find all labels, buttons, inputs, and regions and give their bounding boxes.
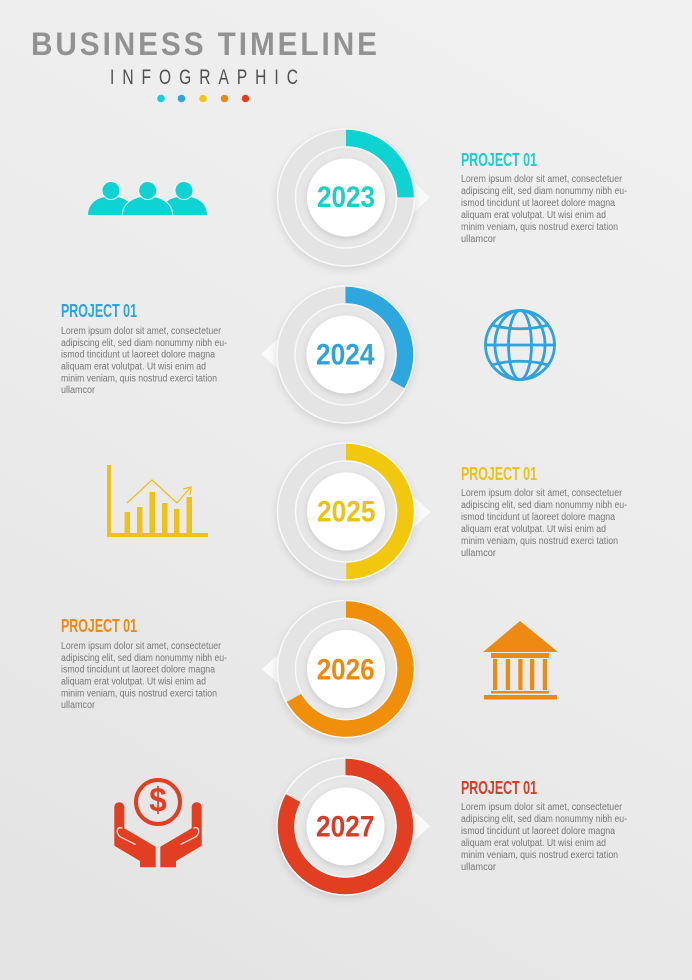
title: BUSINESS TIMELINE	[31, 26, 377, 62]
text block: project 2027	[461, 777, 627, 873]
text block: project 2026: PROJECT 01	[61, 615, 137, 636]
text block: project 2026: adipiscing elit, sed diam nonummy nibh eu-	[61, 653, 227, 664]
icon: globe	[485, 310, 555, 380]
text block: project 2027: ismod tincidunt ut laoreet dolore magna	[461, 826, 615, 837]
text block: project 2023: aliquam erat volutpat. Ut wisi enim ad	[461, 210, 606, 221]
timeline node: 2027	[277, 758, 430, 895]
text block: project 2024: Lorem ipsum dolor sit amet, consectetuer	[61, 326, 222, 337]
text block: project 2027: PROJECT 01	[461, 777, 537, 798]
text block: project 2025	[461, 463, 627, 559]
text block: project 2024: PROJECT 01	[61, 300, 137, 321]
text block: project 2023: Lorem ipsum dolor sit amet, consectetuer	[461, 174, 623, 185]
text block: project 2024: ismod tincidunt ut laoreet dolore magna	[61, 350, 215, 360]
text block: project 2025: minim veniam, quis nostrud exerci tation	[461, 536, 618, 547]
text block: project 2023: ullamcor	[461, 234, 497, 245]
text block: project 2024: adipiscing elit, sed diam nonummy nibh eu-	[61, 338, 227, 349]
text block: project 2024: ullamcor	[61, 385, 96, 396]
title	[31, 26, 377, 89]
text block: project 2023: PROJECT 01	[461, 149, 537, 170]
text block: project 2024: aliquam erat volutpat. Ut wisi enim ad	[61, 362, 206, 372]
title: INFOGRAPHIC	[110, 65, 298, 89]
text block: project 2023: minim veniam, quis nostrud exerci tation	[461, 222, 618, 233]
text block: project 2026: minim veniam, quis nostrud exerci tation	[61, 688, 217, 700]
icon: people	[88, 182, 208, 216]
text block: project 2025: Lorem ipsum dolor sit amet, consectetuer	[461, 488, 623, 499]
text block: project 2026: Lorem ipsum dolor sit amet, consectetuer	[61, 641, 222, 652]
text block: project 2025: PROJECT 01	[461, 463, 537, 484]
timeline node: 2023	[278, 129, 430, 266]
timeline node: 2026: 2026	[317, 654, 375, 686]
icon: hands holding coin: $	[149, 780, 167, 819]
timeline node: 2024: 2024	[316, 338, 375, 372]
text block: project 2026: ismod tincidunt ut laoreet dolore magna	[61, 664, 215, 676]
icon: bank building	[483, 621, 558, 700]
icon: bar chart	[107, 465, 208, 537]
timeline node: 2023: 2023	[317, 181, 375, 214]
text block: project 2027: aliquam erat volutpat. Ut wisi enim ad	[461, 838, 606, 849]
text block: project 2027: adipiscing elit, sed diam nonummy nibh eu-	[461, 814, 627, 825]
text block: project 2027: ullamcor	[461, 862, 497, 873]
text block: project 2026: ullamcor	[61, 700, 96, 711]
timeline node: 2025: 2025	[317, 496, 376, 528]
timeline node: 2026	[262, 600, 414, 738]
text block: project 2024	[61, 300, 227, 396]
text block: project 2023	[461, 149, 627, 245]
text block: project 2027: minim veniam, quis nostrud exerci tation	[461, 850, 618, 861]
text block: project 2026	[61, 615, 227, 711]
text block: project 2027: Lorem ipsum dolor sit amet, consectetuer	[461, 802, 623, 813]
timeline node: 2025	[278, 443, 431, 580]
text block: project 2023: ismod tincidunt ut laoreet dolore magna	[461, 198, 615, 209]
text block: project 2026: aliquam erat volutpat. Ut wisi enim ad	[61, 676, 206, 688]
decorative colour dots	[157, 95, 249, 102]
text block: project 2025: ullamcor	[461, 548, 497, 559]
timeline node: 2024	[261, 286, 414, 423]
text block: project 2025: ismod tincidunt ut laoreet dolore magna	[461, 512, 615, 523]
icon: hands holding coin	[114, 780, 202, 867]
text block: project 2024: minim veniam, quis nostrud exerci tation	[61, 374, 217, 384]
text block: project 2025: aliquam erat volutpat. Ut wisi enim ad	[461, 524, 606, 535]
timeline node: 2027: 2027	[316, 810, 374, 844]
text block: project 2023: adipiscing elit, sed diam nonummy nibh eu-	[461, 186, 627, 197]
text block: project 2025: adipiscing elit, sed diam nonummy nibh eu-	[461, 500, 627, 511]
